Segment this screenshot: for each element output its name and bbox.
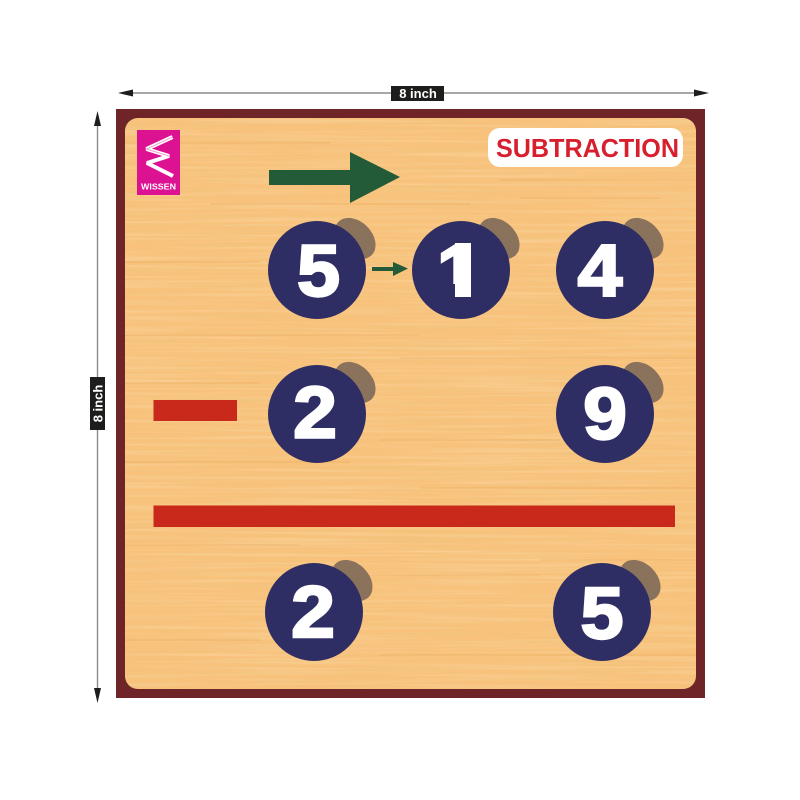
token: 5 result ones [553,552,669,661]
token: 1 minuend tens [412,218,520,319]
token: 1 minuend tens: 1 [437,230,479,312]
wood panel [125,118,696,689]
dimension: top width: 8 inch [399,86,437,101]
board frame [116,109,705,698]
result line [154,506,675,527]
token: 5 minuend hundreds [268,210,384,319]
token: 4 minuend ones [556,210,672,319]
token: 9 subtrahend ones: 9 [583,374,627,455]
token: 9 subtrahend ones [556,354,672,463]
title badge: subtraction: SUBTRACTION [496,133,679,163]
token: 2 result hundreds [265,552,381,661]
logo: Wissen [137,130,180,195]
logo: Wissen: WISSEN [141,182,176,192]
token: 5 result ones: 5 [580,573,624,654]
token: 2 result hundreds: 2 [291,572,335,653]
token: 5 minuend hundreds: 5 [297,230,340,312]
dimension: left height [90,111,106,703]
dimension: top width [118,86,709,101]
token: 2 subtrahend hundreds: 2 [293,372,337,454]
token: 2 subtrahend hundreds [268,354,384,463]
arrow: direction of working [269,152,400,203]
token: 4 minuend ones: 4 [578,231,623,312]
dimension: left height: 8 inch [90,385,106,422]
minus sign [154,400,237,421]
arrow: borrow [372,262,408,276]
